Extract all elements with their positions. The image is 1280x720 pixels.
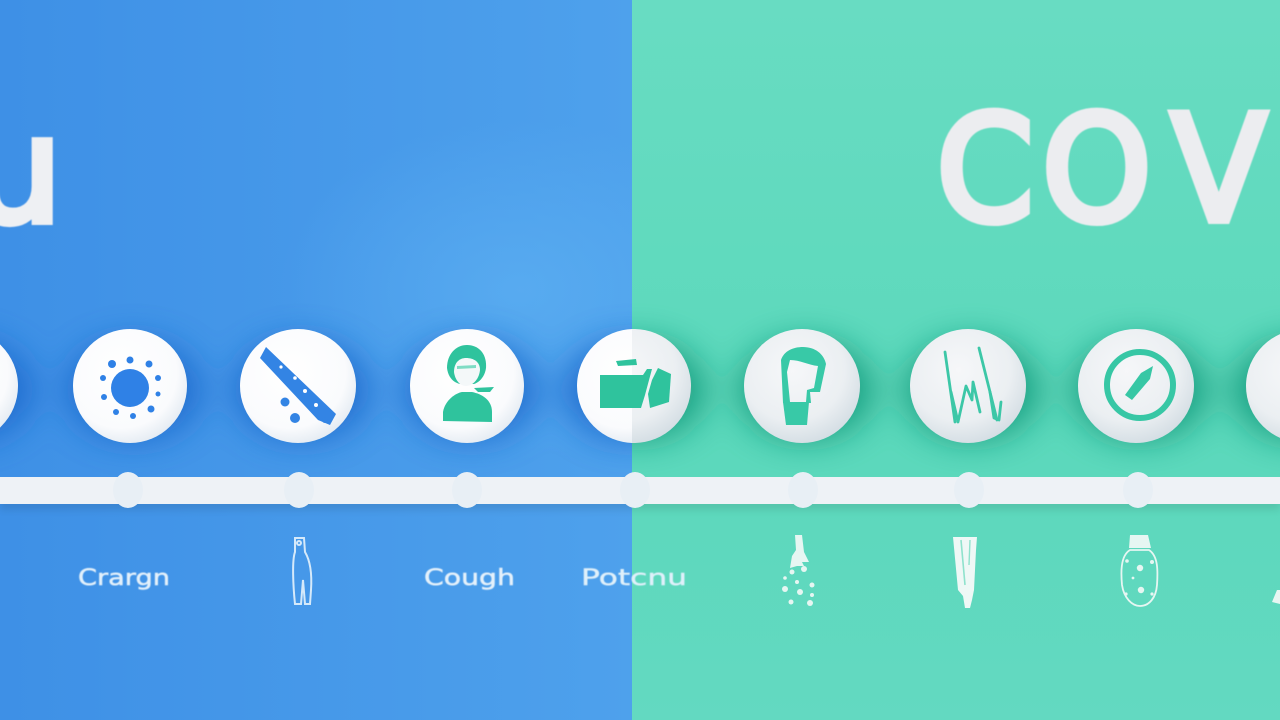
icon: cropped right mark	[1272, 590, 1280, 604]
ball shadows: covid side	[570, 340, 1280, 440]
icon: person	[443, 345, 494, 422]
title: covid: COV	[937, 85, 1266, 255]
label: Crargn: Crargn	[78, 566, 170, 591]
ball: virus icon	[73, 329, 187, 443]
icon: swab	[953, 537, 977, 608]
icon: tube	[781, 347, 826, 425]
ball: far right	[1246, 329, 1280, 443]
ball: spray icon	[240, 329, 356, 443]
ball shadows: flu side	[0, 340, 698, 440]
ball: far left	[0, 329, 18, 443]
icon: virus	[100, 356, 161, 419]
icon: spray band	[260, 347, 336, 425]
label: Cough: Cough	[424, 566, 515, 591]
ball: center, covid half	[632, 329, 691, 443]
icon: spray bottle	[782, 535, 814, 606]
ball: swab lines icon	[910, 329, 1026, 443]
icon: scribble lines	[945, 348, 1001, 422]
ball: person icon	[410, 329, 524, 443]
panel: flu background	[0, 0, 632, 720]
ball: tube icon	[744, 329, 860, 443]
icon: capsule with dots	[1121, 535, 1157, 606]
ball: center, flu half	[577, 329, 632, 443]
icon: thin tube outline	[293, 538, 311, 604]
timeline rail	[0, 472, 1280, 510]
label: Potcnu: Potcnu	[581, 566, 687, 591]
ball: ring icon	[1078, 329, 1194, 443]
panel: covid background	[632, 0, 1280, 720]
icon: center folder	[600, 359, 671, 408]
icon: ring with capsule	[1107, 352, 1173, 418]
